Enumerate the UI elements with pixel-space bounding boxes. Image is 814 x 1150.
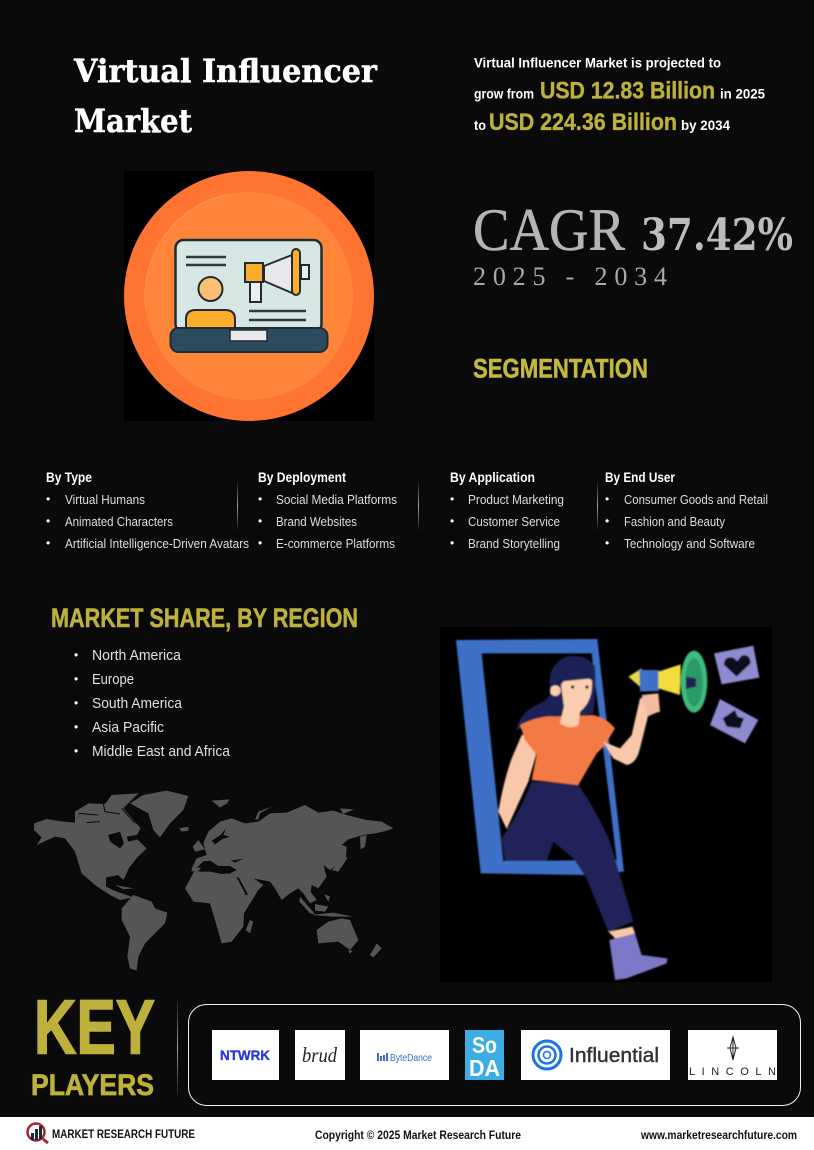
column: by end user: Technology and Software <box>624 536 755 551</box>
market projection text: USD 224.36 Billion <box>489 109 677 136</box>
phone frame <box>456 639 624 875</box>
column: by deployment: By Deployment <box>258 469 346 485</box>
logo: SoDA <box>465 1030 504 1081</box>
list: regions: • <box>74 672 78 686</box>
title <box>73 52 378 140</box>
column: by end user <box>605 469 768 551</box>
list: regions: Middle East and Africa <box>92 743 231 760</box>
list: regions: • <box>74 744 78 758</box>
column: by application: • <box>450 514 454 528</box>
heading: key players: PLAYERS <box>31 1069 154 1102</box>
market projection text: in 2025 <box>720 86 765 102</box>
heading: market share by region: MARKET SHARE, BY REGION <box>51 603 358 633</box>
column: by application: By Application <box>450 469 535 485</box>
logo: NTWRK: NTWRK <box>220 1047 270 1063</box>
column: by end user: • <box>605 514 609 528</box>
column: by application: Customer Service <box>468 514 560 529</box>
column: by type: Virtual Humans <box>65 492 145 507</box>
megaphone <box>628 668 642 688</box>
column: by application <box>450 469 564 551</box>
column: by type: • <box>46 514 50 528</box>
market projection text <box>474 54 765 136</box>
illustration: woman with megaphone stepping out of phone <box>440 627 772 982</box>
footer brand: MARKET RESEARCH FUTURE <box>52 1127 195 1141</box>
column: by type: Artificial Intelligence-Driven Avatars <box>65 536 249 551</box>
title: Market <box>74 102 192 140</box>
column: by end user: Fashion and Beauty <box>624 514 725 529</box>
column: by deployment <box>258 469 397 551</box>
column: by end user: By End User <box>605 469 675 485</box>
logo: brud: brud <box>302 1043 337 1067</box>
column: by end user: Consumer Goods and Retail <box>624 492 768 507</box>
left arm <box>498 735 536 829</box>
CAGR figure <box>473 197 793 291</box>
logo: Lincoln: LINCOLN <box>689 1066 776 1078</box>
column: by deployment: Brand Websites <box>276 514 357 529</box>
column: by type: Animated Characters <box>65 514 173 529</box>
list: regions: • <box>74 696 78 710</box>
column: by deployment: • <box>258 514 262 528</box>
logo: SoDA: So <box>472 1032 497 1058</box>
CAGR figure: 2025 - 2034 <box>473 262 667 291</box>
footer <box>0 1117 814 1150</box>
column: by deployment: • <box>258 492 262 506</box>
CAGR figure: CAGR <box>473 197 625 263</box>
market projection text: to <box>474 117 486 133</box>
column: by type <box>46 469 249 551</box>
column: by type: • <box>46 536 50 550</box>
logo: NTWRK <box>212 1030 279 1080</box>
title: Virtual Influencer <box>73 52 378 90</box>
heading: segmentation: SEGMENTATION <box>473 354 648 384</box>
heading: key players <box>31 984 155 1102</box>
column: by application: Brand Storytelling <box>468 536 560 551</box>
market projection text: grow from <box>474 86 534 102</box>
list: regions: Asia Pacific <box>92 719 164 736</box>
column: by end user: • <box>605 536 609 550</box>
list: regions: Europe <box>92 671 134 688</box>
world map <box>34 791 393 971</box>
list: regions: • <box>74 648 78 662</box>
shirt <box>520 715 615 785</box>
logo: Influential: Influential <box>569 1045 659 1067</box>
icon: magnifier logo <box>28 1124 48 1143</box>
list: regions: North America <box>92 647 182 664</box>
right arm <box>603 693 660 765</box>
column: by deployment: • <box>258 536 262 550</box>
list: regions: South America <box>92 695 183 712</box>
copyright: Copyright © 2025 Market Research Future <box>315 1128 521 1142</box>
logo: Influential <box>521 1030 670 1080</box>
list: regions: • <box>74 720 78 734</box>
column: by deployment: Social Media Platforms <box>276 492 397 507</box>
column: by application: • <box>450 492 454 506</box>
market projection text: Virtual Influencer Market is projected to <box>474 54 721 70</box>
logo: SoDA: DA <box>469 1055 500 1081</box>
boot <box>608 927 635 940</box>
list: regions <box>74 647 231 760</box>
icon: laptop with megaphone <box>124 171 374 421</box>
column: by application: Product Marketing <box>468 492 564 507</box>
hair <box>516 656 596 730</box>
logo: ByteDance: ByteDance <box>390 1053 432 1064</box>
neck and face <box>560 678 592 727</box>
heading: key players: KEY <box>34 984 155 1070</box>
column: by end user: • <box>605 492 609 506</box>
column: by type: By Type <box>46 469 92 485</box>
market projection text: by 2034 <box>681 117 730 133</box>
column: by application: • <box>450 536 454 550</box>
pants <box>502 782 633 932</box>
panel: key player logos <box>188 1004 800 1106</box>
logo: brud <box>295 1030 345 1080</box>
column: by type: • <box>46 492 50 506</box>
market projection text: USD 12.83 Billion <box>540 78 715 104</box>
logo: ByteDance <box>360 1030 449 1080</box>
logo: Lincoln <box>688 1030 777 1080</box>
like icons <box>714 646 759 684</box>
hand <box>642 693 660 717</box>
column: by deployment: E-commerce Platforms <box>276 536 395 551</box>
